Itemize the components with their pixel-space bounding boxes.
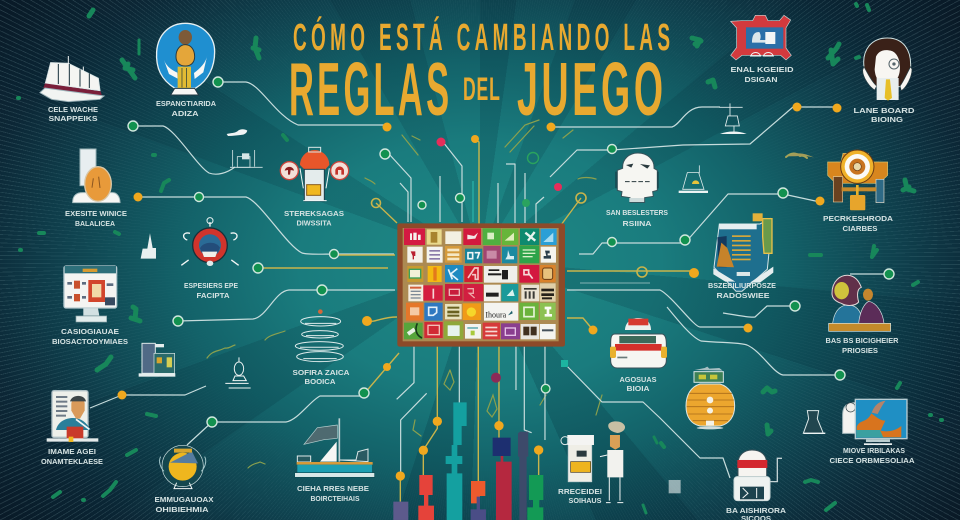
- label: coin gauge: [65, 209, 127, 228]
- label: white capsule robot: AGOSUAS: [620, 375, 657, 384]
- tablet inner board: [403, 228, 559, 341]
- label: ship: CELE WACHE: [48, 105, 98, 114]
- title word: del: DEL: [463, 73, 500, 107]
- tile glyphs: Ihoura: [485, 310, 507, 319]
- label: ship: SNAPPEIKS: [48, 114, 98, 123]
- item: monitor: [64, 266, 117, 322]
- label: two people: [826, 336, 899, 355]
- label: screen map: CIECE ORBMESOLIAA: [830, 456, 915, 465]
- label: chef: RRECEIDEI: [558, 487, 602, 496]
- title: [289, 16, 670, 132]
- label: screen map: [830, 446, 915, 465]
- item: small building: [139, 343, 175, 377]
- label: red window emblem: [730, 65, 794, 84]
- label: orange machine: STEREKSAGAS: [284, 209, 344, 218]
- label: coin gauge: EXESITE WINICE: [65, 209, 127, 218]
- label: yellow dial: [154, 495, 214, 514]
- label: target machine: CIARBES: [842, 224, 878, 233]
- title word: juego: JUEGO: [517, 47, 663, 131]
- tile glyphs: [408, 232, 554, 338]
- label: woman: BIOING: [871, 115, 903, 124]
- item: woman with hair: [863, 38, 912, 101]
- label: red window emblem: ENAL KGEIEID: [730, 65, 794, 74]
- item: small cooling tower: [669, 411, 825, 493]
- item: stacked discs: [295, 309, 343, 362]
- label: white robot: BA AISHIRORA: [726, 506, 787, 515]
- label: stacked discs: [292, 368, 350, 386]
- label: globe figure: ESPANGTIARIDA: [156, 99, 217, 108]
- item: open book: [713, 213, 773, 291]
- label: red wheel: FACIPTA: [196, 291, 230, 300]
- item: notebook with person: [47, 391, 98, 442]
- label: face robot: RSIINA: [622, 219, 652, 228]
- label: face robot: [606, 208, 668, 228]
- label: boat: [297, 484, 369, 503]
- connector lines: [90, 82, 889, 502]
- label: yellow dial: OHIBIEHMIA: [156, 505, 209, 514]
- item: small rocket: [225, 357, 251, 388]
- label: two people: PRIOSIES: [842, 346, 878, 355]
- item: target machine: [828, 150, 888, 210]
- item: red window emblem: [731, 15, 791, 60]
- label: open book: BSZEBILIURPOSZE: [708, 281, 776, 290]
- tablet frame: [397, 223, 565, 347]
- label: white capsule robot: [620, 375, 657, 393]
- bar red: [418, 475, 434, 520]
- label: monitor: [52, 327, 128, 346]
- item: screen map: [843, 399, 907, 445]
- label: coin gauge: BALALICEA: [75, 219, 116, 228]
- bar green: [527, 475, 543, 520]
- connector dots: [118, 77, 894, 427]
- label: globe figure: ADIZA: [172, 109, 199, 118]
- bar purple: [393, 502, 408, 520]
- label: red window emblem: DSIGAN: [744, 75, 778, 84]
- label: boat: BOIRCTEIHAIS: [310, 494, 360, 503]
- item: small tower and tent: [679, 103, 814, 193]
- label: stacked discs: SOFIRA ZAICA: [292, 368, 350, 377]
- item: small swirl and factory: [227, 129, 263, 167]
- label: notebook: ONAMTEKLAESE: [41, 457, 103, 466]
- bar slate: [518, 432, 528, 520]
- tile grid: [404, 228, 557, 339]
- label: target machine: [823, 214, 894, 233]
- item: yellow barrel: [686, 367, 735, 429]
- olive squiggles: [207, 120, 807, 468]
- label: notebook: IMAME AGEI: [48, 447, 96, 456]
- bar teal: [446, 402, 467, 520]
- label: chef: [558, 487, 602, 505]
- item: red wheel: [181, 218, 239, 266]
- item: ship: [40, 56, 104, 102]
- label: monitor: BIOSACTOOYMIAES: [52, 337, 128, 346]
- item: coin gauge: [73, 149, 120, 203]
- central tablet of tiles: [397, 223, 565, 347]
- item: globe figure: [157, 23, 215, 95]
- label: screen map: MIOVE IRBILAKAS: [843, 446, 905, 455]
- title line one: CÓMO ESTÁ CAMBIANDO LAS: [293, 16, 670, 59]
- title word: reglas: REGLAS: [289, 48, 449, 132]
- bar crimson: [496, 456, 512, 520]
- label: globe figure: [156, 99, 217, 118]
- item: two people: [829, 275, 891, 331]
- label: chef: SOIHAUS: [568, 496, 602, 505]
- label: red wheel: ESPESIERS EPE: [184, 281, 238, 290]
- item: boat: [295, 418, 375, 477]
- label: monitor: CASIOGIAUAE: [61, 327, 119, 336]
- label: notebook: [41, 447, 103, 466]
- label: stacked discs: BOOICA: [304, 377, 336, 386]
- label: open book: [708, 281, 776, 300]
- bar indigo: [471, 497, 486, 520]
- label: orange machine: [284, 209, 344, 228]
- item: face robot: [616, 153, 658, 202]
- bar orange: [471, 481, 485, 503]
- item: white capsule robot: [610, 318, 667, 368]
- label: open book: RADOSWIEE: [716, 291, 770, 300]
- label: face robot: SAN BESLESTERS: [606, 208, 668, 217]
- item: orange machine with side badges: [280, 147, 349, 201]
- label: red wheel: [184, 281, 238, 300]
- bar navy: [493, 438, 511, 456]
- label: white capsule robot: BIOIA: [626, 384, 650, 393]
- label: boat: CIEHA RRES NEBE: [297, 484, 369, 493]
- bottom bar chart: [393, 373, 550, 520]
- label: two people: BAS BS BICIGHEIER: [826, 336, 899, 345]
- item: white robot: [734, 450, 782, 501]
- item: chef and machine: [561, 421, 625, 503]
- item: yellow dial: [160, 445, 206, 489]
- label: woman: LANE BOARD: [854, 106, 915, 115]
- item: small obelisk: [141, 233, 156, 259]
- label: woman: [854, 106, 915, 124]
- label: white robot: [726, 506, 787, 520]
- label: ship: [48, 105, 98, 123]
- label: yellow dial: EMMUGAUOAX: [154, 495, 214, 504]
- label: target machine: PECRKESHRODA: [823, 214, 894, 223]
- label: orange machine: DIWSSITA: [296, 218, 332, 228]
